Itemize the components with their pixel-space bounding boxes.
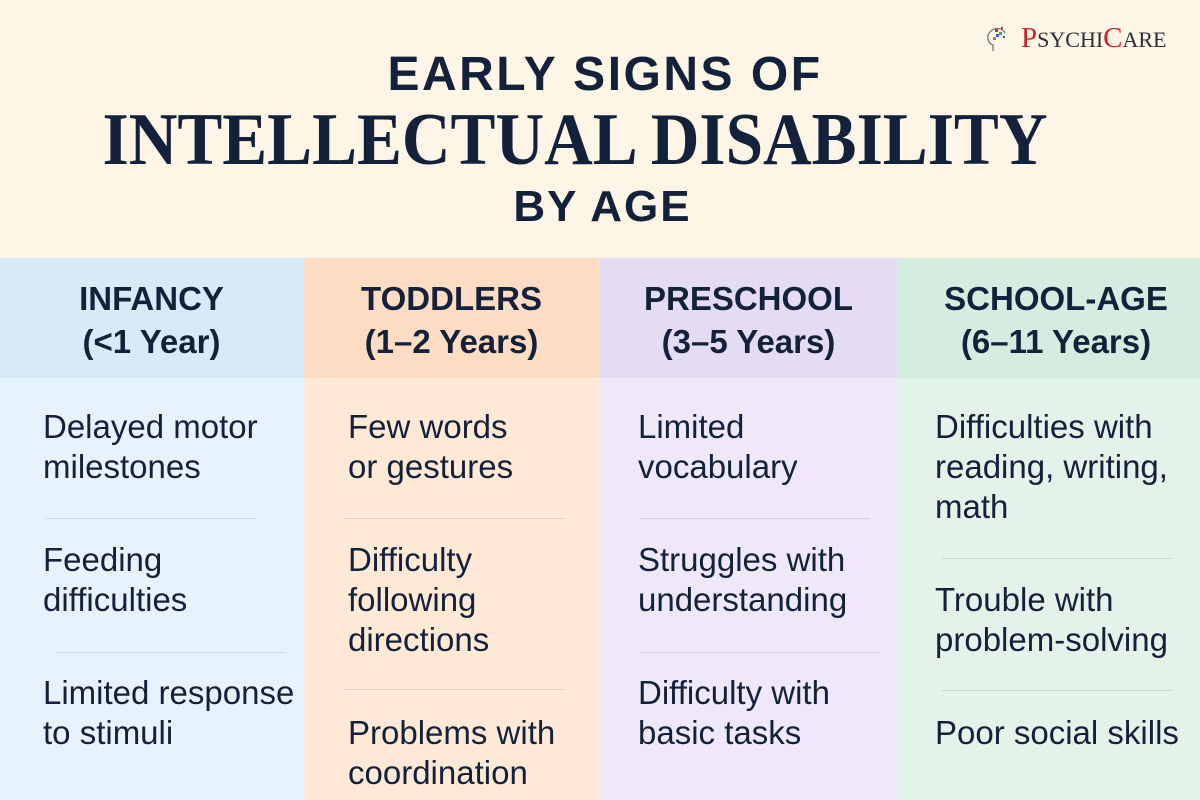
item: vocabulary <box>638 448 798 485</box>
panel: toddlers <box>303 258 600 800</box>
item: difficulties <box>43 581 187 618</box>
item <box>43 408 258 485</box>
item: Few words <box>348 408 508 445</box>
panel: preschool <box>600 258 897 800</box>
item: directions <box>348 621 489 658</box>
item: Difficulties with <box>935 408 1153 445</box>
panel: infancy <box>0 258 303 800</box>
item: problem-solving <box>935 621 1168 658</box>
icon: head <box>987 27 1006 51</box>
item: Struggles with <box>638 541 845 578</box>
header: infancy: INFANCY <box>79 280 224 317</box>
header: school-age <box>897 258 1200 378</box>
item <box>935 408 1168 525</box>
header: school-age: (6–11 Years) <box>961 323 1151 360</box>
header: school-age: SCHOOL-AGE <box>944 280 1168 317</box>
item: to stimuli <box>43 714 173 751</box>
item: Difficulty <box>348 541 472 578</box>
item: coordination <box>348 754 528 791</box>
item <box>935 581 1168 658</box>
item <box>348 541 489 658</box>
header: toddlers: TODDLERS <box>361 280 542 317</box>
title: INTELLECTUAL DISABILITY <box>103 99 1047 181</box>
item: Limited response <box>43 674 294 711</box>
logo <box>987 22 1166 54</box>
item: Poor social skills <box>935 714 1179 751</box>
item <box>638 674 830 751</box>
item <box>638 408 798 485</box>
item: reading, writing, <box>935 448 1168 485</box>
item: Feeding <box>43 541 162 578</box>
item <box>348 408 513 485</box>
header: toddlers <box>303 258 600 378</box>
item: Delayed motor <box>43 408 258 445</box>
header: preschool <box>600 258 897 378</box>
item: milestones <box>43 448 201 485</box>
item <box>43 541 187 618</box>
header: infancy <box>0 258 303 378</box>
item: understanding <box>638 581 847 618</box>
item <box>638 541 847 618</box>
item: Difficulty with <box>638 674 830 711</box>
item: following <box>348 581 476 618</box>
title: BY AGE <box>513 182 692 231</box>
title <box>103 48 1047 231</box>
item: basic tasks <box>638 714 801 751</box>
header: toddlers: (1–2 Years) <box>365 323 538 360</box>
item: Problems with <box>348 714 555 751</box>
header: preschool: (3–5 Years) <box>662 323 835 360</box>
item: Trouble with <box>935 581 1114 618</box>
header: preschool: PRESCHOOL <box>644 280 853 317</box>
item: math <box>935 488 1008 525</box>
header: infancy: (<1 Year) <box>83 323 220 360</box>
brand name: PSYCHICARE <box>1021 22 1166 54</box>
item: or gestures <box>348 448 513 485</box>
item: Limited <box>638 408 744 445</box>
item <box>43 674 294 751</box>
title: EARLY SIGNS OF <box>387 48 823 101</box>
panel: school-age <box>897 258 1200 800</box>
item <box>348 714 555 791</box>
